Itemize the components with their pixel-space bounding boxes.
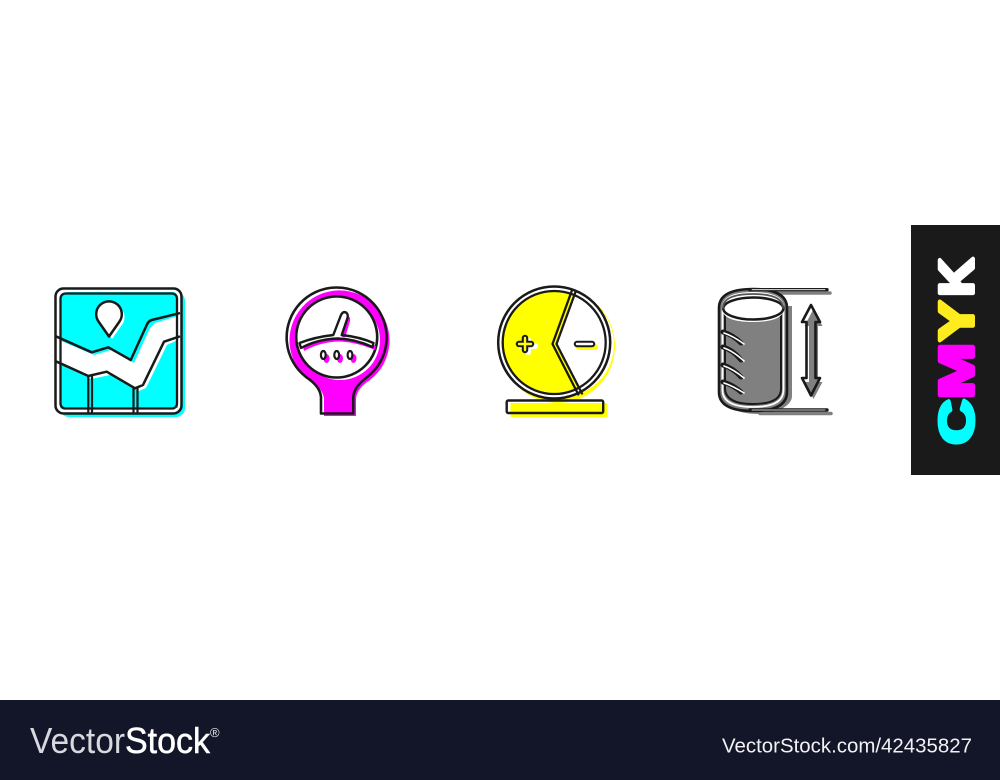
icon: pie balance with plus and minus [498,286,615,417]
cylinder top [722,292,784,322]
CMYK badge [911,225,1000,475]
coil ridges [723,332,744,393]
letter Y: Y [930,301,984,341]
dimension lines [750,290,827,410]
icon: map with location pin [56,288,185,417]
gauge body outline [287,287,387,414]
VectorStock logo: Stock [125,720,211,761]
needle and scale shadow [303,316,376,351]
VectorStock logo: Vector [30,720,125,761]
cylinder body [719,289,787,411]
scale dots [321,351,356,363]
location pin [100,305,124,339]
needle and scale [300,312,374,348]
base bar [510,403,608,417]
gauge dial [296,296,377,378]
letter C: C [930,399,983,444]
image id link: VectorStock.com/42435827 [722,736,972,758]
letter K: K [929,258,983,296]
road lines [57,313,179,360]
plus sign [521,340,535,352]
outer rings [498,286,610,398]
dimension line shadows [760,293,831,414]
double arrow [802,305,822,399]
icon: cylinder height dimension [719,289,831,414]
VectorStock logo [30,720,220,761]
letter M: M [930,343,984,399]
footer bar [0,700,1000,780]
icon: pressure gauge [287,287,390,416]
outer frame [56,288,182,414]
chevron slice [552,291,578,394]
minus sign [579,344,595,350]
VectorStock logo: ® [210,725,220,740]
